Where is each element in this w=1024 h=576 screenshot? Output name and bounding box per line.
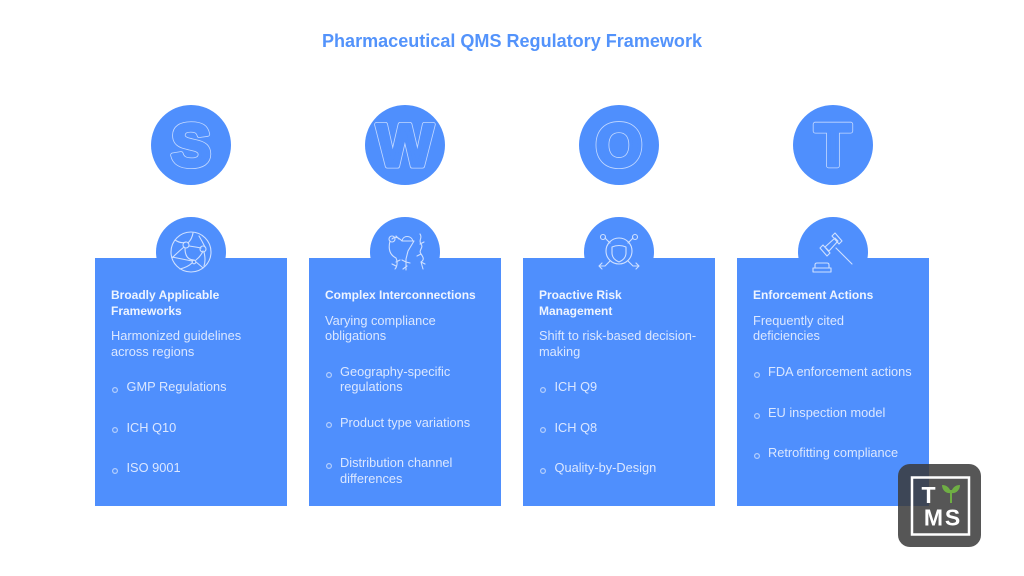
letter badge: S: S — [171, 112, 211, 179]
panel: weaknesses: obligations — [325, 328, 386, 343]
letter badge: O — [579, 105, 659, 185]
letter badge: O: O — [596, 112, 642, 179]
bullet list: ICH Q9 — [554, 379, 597, 394]
letter badge: T: T — [815, 112, 851, 179]
icon: shield with arrows — [599, 234, 639, 269]
description: Frequently cited — [753, 313, 844, 328]
description: Shift to risk-based decision- — [539, 328, 696, 343]
bullet list — [113, 379, 227, 475]
bullet list: Quality-by-Design — [554, 460, 656, 475]
panel: opportunities: Management — [539, 304, 612, 318]
bullet list: Distribution channel — [340, 455, 452, 470]
letter badge: W — [365, 105, 445, 185]
panel: opportunities — [523, 217, 715, 506]
description: Harmonized guidelines — [111, 328, 241, 343]
heading: Complex Interconnections — [325, 288, 476, 302]
bullet list: Geography-specific — [340, 364, 451, 379]
logo: TMS: M — [924, 504, 943, 530]
heading: Enforcement Actions — [753, 288, 874, 302]
bullet list: ICH Q8 — [554, 420, 597, 435]
panel: opportunities: making — [539, 344, 580, 359]
letter badge: W: W — [377, 112, 434, 179]
letter badge: T: T — [815, 112, 851, 179]
bullet list: Product type variations — [340, 415, 470, 430]
bullet list — [755, 364, 912, 460]
bullet list: GMP Regulations — [126, 379, 227, 394]
panel: strengths: Frameworks — [111, 304, 182, 318]
panel: strengths — [95, 217, 287, 506]
bullet list — [541, 379, 656, 475]
heading: Broadly Applicable — [111, 288, 220, 302]
icon: gavel — [813, 233, 852, 272]
letter badge: S: S — [171, 112, 211, 179]
logo: TMS: T — [921, 482, 936, 508]
icon: globe network — [171, 232, 211, 272]
logo: TMS — [898, 464, 981, 547]
title: Pharmaceutical QMS Regulatory Framework — [322, 31, 703, 51]
letter badge: T — [793, 105, 873, 185]
letter badge: W: W — [377, 112, 434, 179]
bullet list: Retrofitting compliance — [768, 445, 898, 460]
bullet list — [327, 364, 470, 486]
letter badge: S — [151, 105, 231, 185]
heading: Proactive Risk — [539, 288, 622, 302]
letter badge: O: O — [596, 112, 642, 179]
description: Varying compliance — [325, 313, 436, 328]
panel: strengths: across regions — [111, 344, 194, 359]
bullet list: differences — [340, 471, 402, 486]
panel: threats — [737, 217, 929, 506]
icon: tangled roots — [389, 234, 425, 270]
bullet list: ICH Q10 — [126, 420, 176, 435]
panel: threats: deficiencies — [753, 328, 820, 343]
panel: weaknesses — [309, 217, 501, 506]
bullet list: ISO 9001 — [126, 460, 181, 475]
bullet list: regulations — [340, 379, 403, 394]
bullet list: FDA enforcement actions — [768, 364, 912, 379]
bullet list: EU inspection model — [768, 405, 885, 420]
logo: TMS: S — [945, 504, 960, 530]
